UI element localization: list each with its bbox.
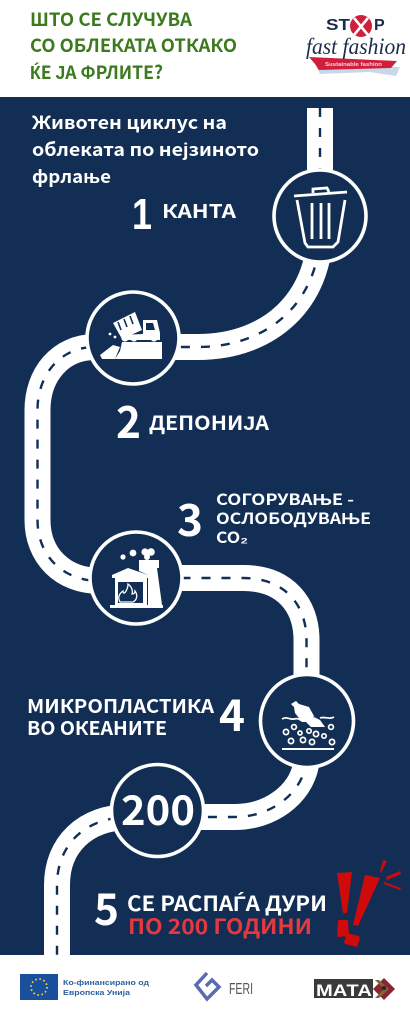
title: ШТО СЕ СЛУЧУВА (30, 6, 192, 32)
step 1 (132, 190, 237, 239)
logo: stop fast fashion: P (374, 17, 385, 34)
icon: trash bin (274, 170, 366, 262)
step 4: ВО ОКЕАНИТЕ (27, 714, 167, 741)
title (30, 6, 237, 85)
footer: EU co-funding (20, 974, 150, 1000)
step 5 (94, 874, 327, 941)
icon: incinerator (90, 532, 182, 624)
icon: exclamation marks (337, 860, 401, 947)
step 1: 1 (132, 190, 152, 239)
icon: microplastics in ocean (260, 674, 354, 768)
step 2: ДЕПОНИЈА (149, 407, 270, 436)
step 3 (177, 485, 371, 549)
milestone: 200 (112, 764, 204, 856)
step 3: 3 (177, 485, 203, 549)
step 2 (116, 387, 270, 451)
footer: FERI logo: FERI (229, 981, 253, 998)
heading: lifecycle: фрлање (32, 163, 111, 189)
footer: MATA logo: МАТА (316, 981, 372, 1000)
footer: MATA logo (314, 978, 395, 1000)
step 2: 2 (116, 387, 141, 451)
step 4: 4 (219, 680, 245, 744)
step 5: СЕ РАСПА ЃА ДУРИ (127, 888, 327, 918)
step 4 (27, 680, 245, 744)
logo: stop fast fashion (306, 15, 406, 76)
step 3: CO₂ (216, 526, 248, 548)
logo: stop fast fashion: fast fashion (306, 34, 406, 59)
title: СО ОБЛЕКАТА ОТКАКО (30, 32, 237, 58)
heading: lifecycle (32, 109, 259, 189)
milestone: 200: 200 (121, 777, 195, 837)
heading: lifecycle: облеката по нејзиното (32, 136, 259, 162)
heading: lifecycle: Животен циклус на (32, 109, 227, 135)
footer: EU co-funding: Европска Унија (63, 988, 131, 997)
icon: landfill truck (87, 292, 179, 384)
logo: stop fast fashion: ST (326, 17, 350, 34)
footer: FERI logo (196, 973, 253, 999)
road (38, 108, 320, 965)
step 1: КАНТА (162, 197, 237, 224)
logo: stop fast fashion: Sustainable fashion (325, 62, 383, 68)
step 4: МИКРОПЛАСТИКА (27, 692, 215, 719)
step 5: ПО 200 ГОДИНИ (128, 911, 312, 941)
step 3: СОГОРУВАЊЕ - (216, 488, 354, 510)
footer: EU co-funding: Ко-финансирано од (63, 978, 150, 987)
title: ЌЕ ЈА ФРЛИТЕ? (30, 59, 163, 85)
step 5: 5 (94, 874, 119, 938)
step 3: ОСЛОБОДУВАЊЕ (216, 507, 371, 529)
